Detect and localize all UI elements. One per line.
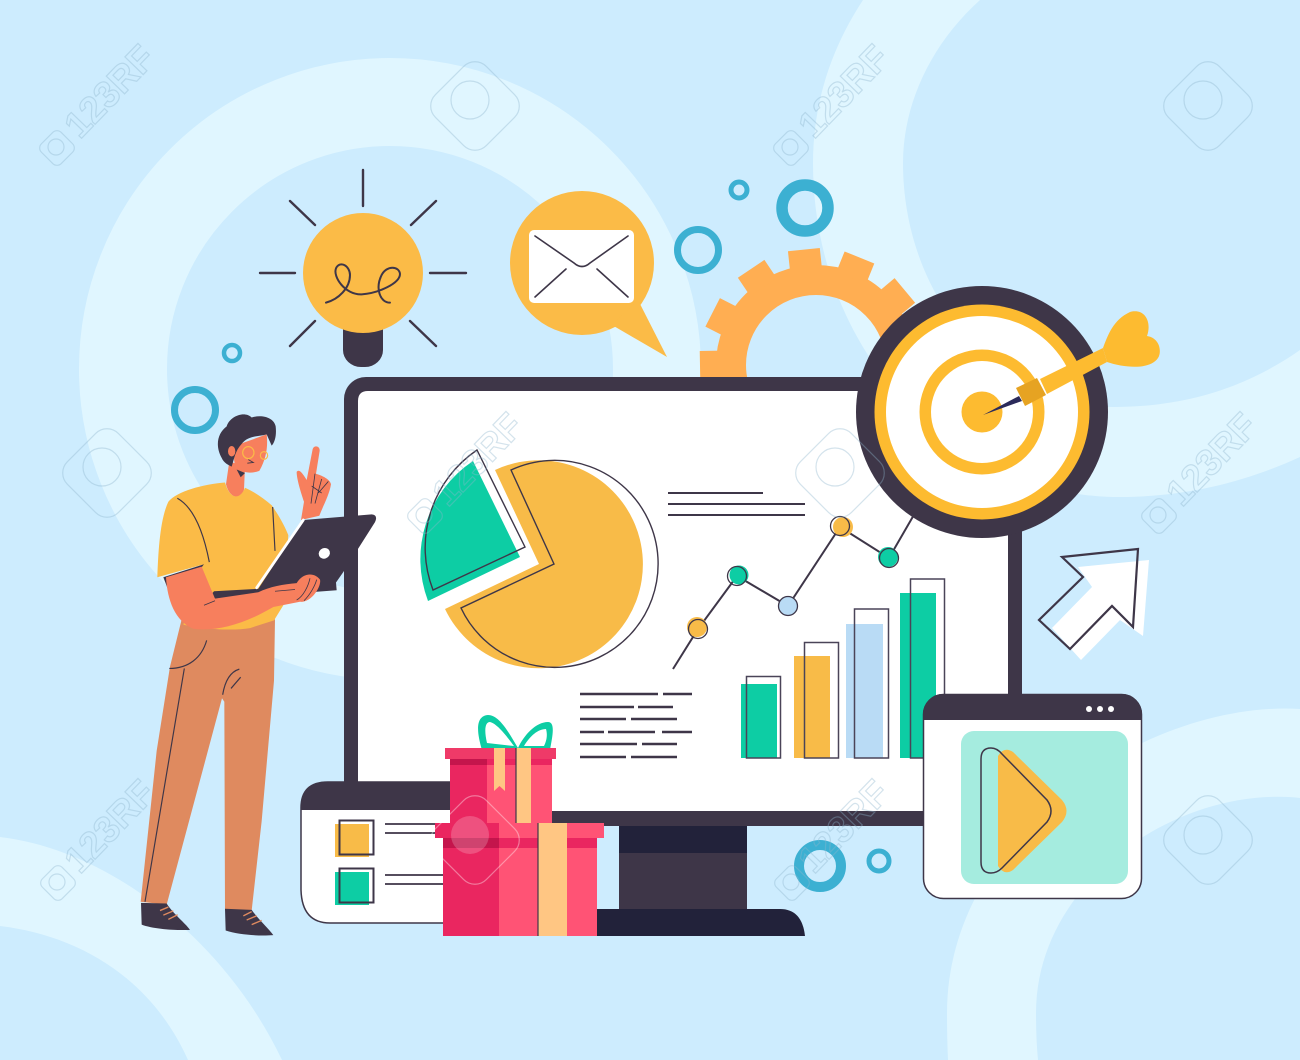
watermarks: 123RF (790, 37, 897, 146)
watermarks: 123RF (790, 772, 897, 881)
watermarks (37, 37, 1265, 903)
icon: target with dart (856, 286, 1160, 538)
character: man with tablet (141, 414, 376, 935)
dart (983, 311, 1160, 415)
lower gift (435, 823, 604, 936)
watermarks: 123RF (56, 37, 163, 146)
watermarks: 123RF (1158, 405, 1265, 514)
trousers (141, 619, 275, 911)
bow (478, 715, 553, 750)
main pie slice (445, 460, 643, 668)
shirt (157, 482, 288, 630)
icon: decorative rings top (174, 182, 828, 430)
video player window (923, 694, 1142, 898)
neck (226, 461, 245, 497)
monitor screen (344, 377, 1022, 826)
icon: light bulb (260, 170, 466, 367)
checklist window (301, 782, 470, 923)
arm holding tablet (166, 567, 320, 629)
icon: arrow (1039, 549, 1149, 660)
watermarks: 123RF (424, 405, 531, 514)
detached teal wedge (420, 461, 520, 601)
line chart (673, 513, 915, 669)
tablet (212, 514, 376, 599)
play icon (981, 748, 1066, 873)
gift boxes (435, 715, 604, 936)
watermarks: 123RF (56, 772, 163, 881)
upper gift (445, 748, 556, 829)
text lines below pie chart (580, 694, 692, 757)
text lines above line chart (668, 493, 805, 515)
icon: gear (700, 248, 915, 450)
bar chart (741, 579, 944, 758)
pie chart (420, 450, 658, 668)
head (218, 414, 276, 477)
checkbox: yellow (335, 820, 374, 857)
raised hand (297, 446, 331, 520)
icon: rings bottom (799, 845, 889, 887)
icon: speech bubble with envelope (510, 191, 667, 357)
shoes (141, 903, 273, 935)
checkbox: teal (335, 868, 374, 905)
monitor stand (590, 820, 805, 936)
